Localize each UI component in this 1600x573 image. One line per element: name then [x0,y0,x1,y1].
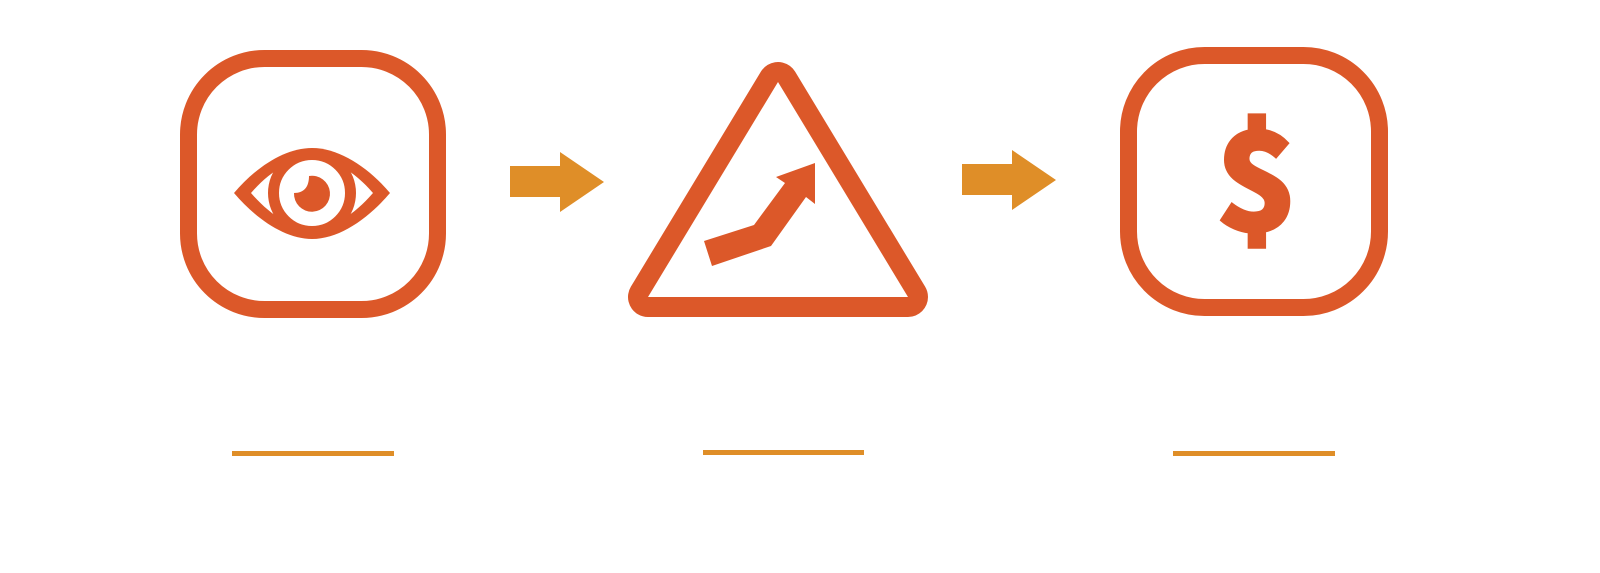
pupil [294,176,330,212]
divider line 3 [1173,451,1335,456]
iris ring [274,154,350,232]
divider line 2 [703,450,864,455]
eye white [251,158,373,229]
icon: eye in rounded square [188,58,438,310]
divider line 1 [232,451,394,456]
icon: warning triangle with rising arrow [648,82,908,297]
arrow: warning to dollar [962,150,1056,210]
dollar sign: $ [1216,74,1298,270]
eye outline [234,148,390,239]
icon: dollar in rounded square [1128,56,1380,308]
arrow: eye to warning [510,152,604,212]
rising arrow [704,163,815,266]
